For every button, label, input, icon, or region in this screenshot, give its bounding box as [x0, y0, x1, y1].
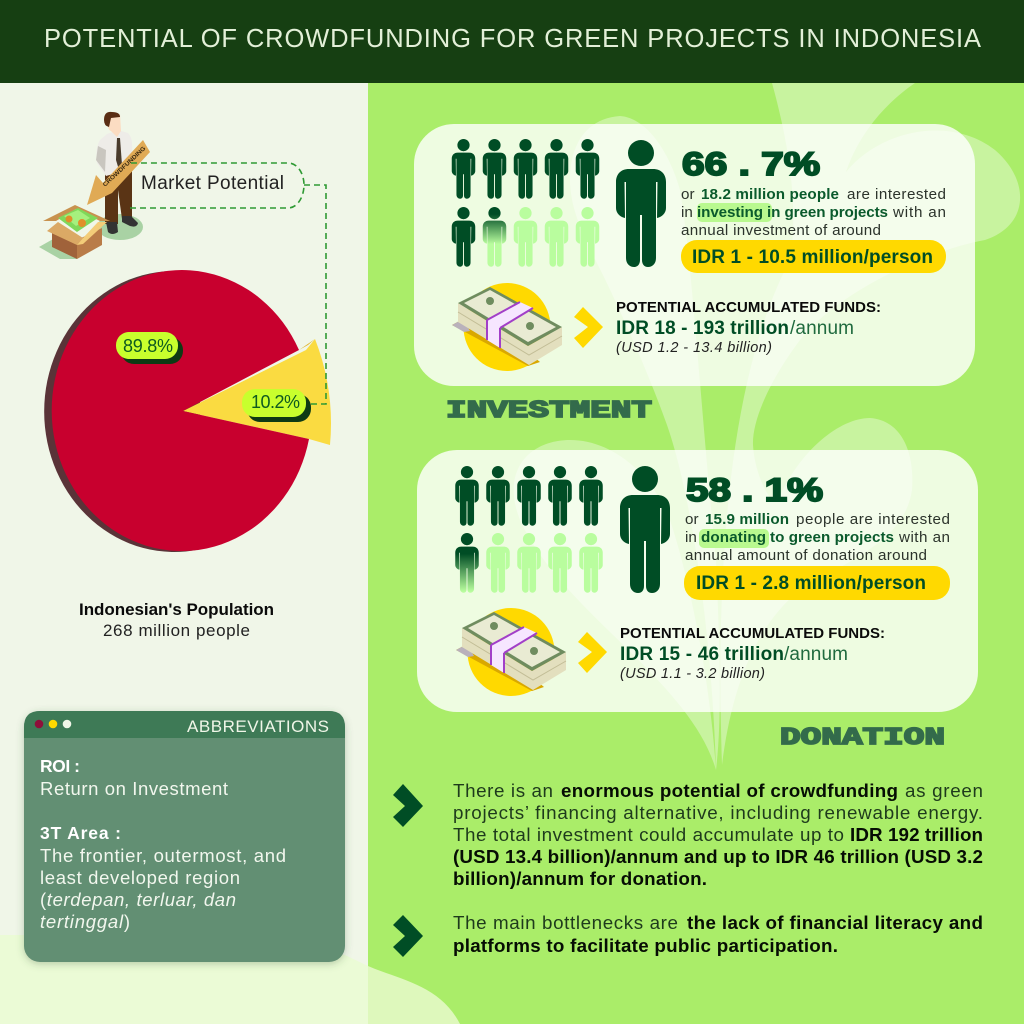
icon: money stack — [452, 283, 562, 371]
statistic text: donating: to green projects — [770, 529, 894, 546]
statistic text: donating: or — [685, 511, 699, 528]
accumulated funds text: investment: IDR 18 - 193 trillion — [616, 318, 789, 339]
text: enormous potential: billion)/annum for donation. — [453, 868, 707, 889]
pie chart: population share — [44, 270, 331, 552]
statistic text: donating — [685, 472, 950, 564]
illustration: man pushing crowdfunding arrow into box — [39, 112, 150, 259]
heading: investment: INVESTMENT — [446, 398, 652, 425]
text: enormous potential: (USD 13.4 billion)/annum and up to IDR 46 trillion (USD 3.2 — [453, 846, 983, 867]
accumulated funds text: donation: (USD 1.1 - 3.2 billion) — [620, 666, 765, 682]
statistic text: investing: are interested — [847, 186, 946, 203]
statistic text: donating: 58 . 1% — [686, 472, 823, 508]
text: main bottlenecks: platforms to facilitate public participation. — [453, 935, 838, 956]
panel: abbreviations: 3T Area : — [40, 823, 121, 843]
statistic text: investing: with an — [892, 204, 946, 221]
panel: abbreviations: Return on Investment — [40, 778, 228, 799]
text: enormous potential: IDR 192 trillion — [850, 824, 983, 845]
text: enormous potential: There is an — [453, 780, 553, 801]
pie label: 89.8%: 89.8% — [123, 336, 173, 356]
panel: abbreviations: tertinggal) — [40, 911, 130, 932]
pie label: 10.2% — [242, 389, 311, 422]
statistic text: investing: investing in green projects — [697, 204, 888, 221]
panel: right background — [368, 83, 1024, 1024]
pie label: 89.8% — [116, 332, 183, 364]
text: main bottlenecks: The main bottlenecks are — [453, 912, 678, 933]
pie label: 10.2%: 10.2% — [251, 392, 300, 412]
text: enormous potential: The total investment could accumulate up to — [453, 824, 844, 845]
right bottom blob — [368, 966, 460, 1024]
panel: donation card — [417, 450, 978, 712]
left bottom blob — [0, 935, 368, 1024]
panel: abbreviations — [24, 711, 345, 962]
pill: donation per person — [684, 566, 950, 600]
statistic text: donating: 15.9 million — [705, 511, 789, 528]
text: enormous potential: as green — [905, 780, 983, 801]
illustration: man pushing crowdfunding arrow into box: CROWDFUNDING — [102, 146, 148, 188]
statistic text: investing: 18.2 million people — [701, 186, 839, 203]
panel: abbreviations: The frontier, outermost, and — [40, 845, 286, 866]
pill: investment per person: IDR 1 - 10.5 million/person — [692, 247, 933, 268]
accumulated funds text: donation — [620, 625, 885, 682]
panel: abbreviations: ABBREVIATIONS — [187, 717, 329, 736]
statistic text: investing — [681, 146, 946, 239]
statistic text: donating: donating — [701, 529, 766, 546]
arrow: to accumulated funds — [578, 632, 607, 673]
accumulated funds text: investment: POTENTIAL ACCUMULATED FUNDS: — [616, 299, 881, 316]
text: main bottlenecks — [453, 912, 983, 956]
statistic text: donating: people are interested — [796, 511, 950, 528]
pictogram: people 58.1% — [455, 466, 670, 593]
decorative plant leaves — [514, 83, 1020, 770]
accumulated funds text: investment — [616, 299, 881, 356]
accumulated funds text: donation: /annum — [784, 644, 848, 665]
accumulated funds text: donation: POTENTIAL ACCUMULATED FUNDS: — [620, 625, 885, 642]
caption: Indonesian population: Indonesian's Population — [79, 600, 274, 619]
pill: investment per person — [681, 240, 946, 273]
caption: Indonesian population: 268 million people — [103, 621, 250, 640]
panel: abbreviations: (terdepan, terluar, dan — [40, 889, 236, 910]
arrow: to accumulated funds — [574, 307, 603, 348]
icon: money stack — [456, 608, 566, 696]
pictogram: people 66.7% — [452, 139, 666, 267]
statistic text: donating: annual amount of donation around — [685, 547, 927, 564]
caption: Indonesian population — [79, 600, 274, 640]
panel: abbreviations: least developed region — [40, 867, 240, 888]
header bar with title — [0, 0, 1024, 83]
heading: donation: DONATION — [780, 725, 945, 752]
text: enormous potential — [453, 780, 983, 889]
panel: abbreviations: ROI : — [40, 756, 80, 776]
header bar with title: POTENTIAL OF CROWDFUNDING FOR GREEN PROJECTS IN INDONESIA — [44, 25, 981, 53]
statistic text: donating: in — [685, 529, 697, 546]
icon: bullet chevron 1 — [393, 784, 423, 827]
accumulated funds text: investment: (USD 1.2 - 13.4 billion) — [616, 340, 772, 356]
statistic text: investing: or — [681, 186, 695, 203]
icon: bullet chevron 2 — [393, 915, 423, 957]
statistic text: investing: in — [681, 204, 693, 221]
statistic text: investing: 66 . 7% — [682, 146, 820, 182]
text: main bottlenecks: the lack of financial literacy and — [687, 912, 983, 933]
statistic text: investing: annual investment of around — [681, 222, 881, 239]
text: enormous potential: enormous potential of crowdfunding — [561, 780, 898, 801]
statistic text: donating: with an — [898, 529, 950, 546]
accumulated funds text: donation: IDR 15 - 46 trillion — [620, 644, 784, 665]
label: market potential: Market Potential — [141, 173, 284, 194]
accumulated funds text: investment: /annum — [790, 318, 854, 339]
dashed connector: market potential to share — [130, 163, 326, 404]
text: enormous potential: projects’ financing alternative, including renewable energy. — [453, 802, 983, 823]
pill: donation per person: IDR 1 - 2.8 million/person — [696, 573, 926, 594]
panel: left background — [0, 83, 368, 1024]
panel: investment card — [414, 124, 975, 386]
